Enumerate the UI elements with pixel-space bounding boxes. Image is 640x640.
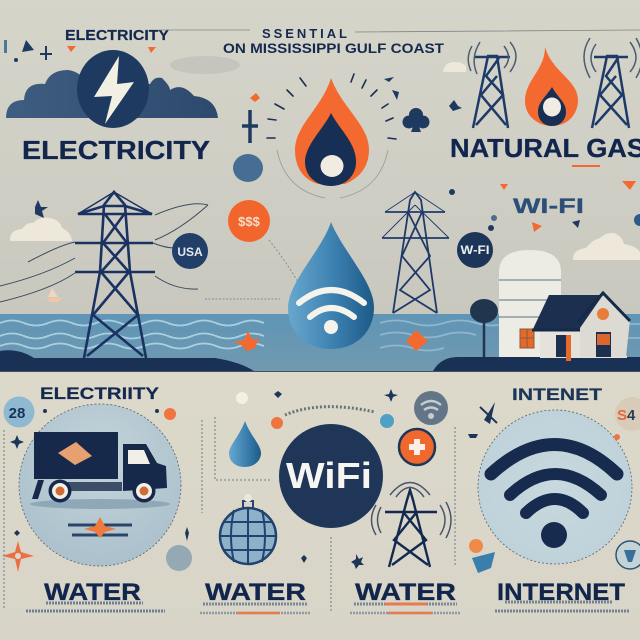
icon: teal badge partial right xyxy=(616,541,640,569)
icon: water drop with wifi xyxy=(288,222,374,349)
heading: electricity: ELECTRICITY xyxy=(22,135,210,165)
badge: grey wifi xyxy=(414,391,448,425)
badge: s4 partial xyxy=(615,397,640,431)
icon: second transmission tower xyxy=(382,192,449,313)
panel: internet wifi circle xyxy=(478,410,632,564)
ground: left shore xyxy=(0,350,254,371)
heading: water three: WATER xyxy=(355,579,456,606)
heading: intenet: INTENET xyxy=(512,385,603,404)
badge: 28: 28 xyxy=(9,405,25,422)
badge: wi-fi: W-FI xyxy=(460,245,490,257)
icons: scattered lower glyphs xyxy=(10,389,620,571)
icon: tree xyxy=(470,299,498,357)
heading: water two: WATER xyxy=(205,579,306,606)
badge: 28 xyxy=(4,396,34,428)
icon: orange boats and diamonds xyxy=(46,288,428,351)
icon: globe xyxy=(220,494,276,564)
cloud: upper right xyxy=(573,233,640,260)
background: upper scene xyxy=(0,0,640,372)
text: water one caption xyxy=(26,603,165,611)
icon: house xyxy=(532,293,630,361)
icons: scattered small upper glyphs xyxy=(4,40,640,232)
divider strip xyxy=(0,371,640,372)
badge: usa: USA xyxy=(177,245,203,259)
background: lower panel band xyxy=(0,372,640,640)
icon: orange star at left xyxy=(2,541,34,572)
badge: wifi large: WiFi xyxy=(286,455,372,496)
chart-like lines: power cables xyxy=(0,204,298,302)
badge: usa xyxy=(172,233,208,269)
heading: wi-fi: WI-FI xyxy=(513,195,584,218)
text: water two caption xyxy=(200,604,310,613)
ground: right shore xyxy=(433,357,640,371)
cloud: upper left xyxy=(10,218,72,241)
smudge: grey text shadow under title xyxy=(170,56,240,74)
text: small arc of glyphs by badge xyxy=(285,407,375,415)
panel: truck circle xyxy=(19,404,181,566)
panel: sea with waves xyxy=(0,314,640,371)
icon: main transmission tower xyxy=(75,192,155,358)
badge: wi-fi xyxy=(457,232,493,268)
badge: orange plus xyxy=(399,429,435,465)
text: internet caption xyxy=(495,602,630,611)
icon: water tank silo xyxy=(499,250,561,357)
panel: central gas flame with rays xyxy=(267,74,396,198)
cloud: tower-side small xyxy=(443,62,466,72)
panel: natural gas towers and flame xyxy=(468,38,640,128)
heading: lower electricity: ELECTRIITY xyxy=(40,384,160,403)
title: essential heading: SSENTIAL xyxy=(262,26,347,41)
text: water three caption xyxy=(350,604,460,613)
badge: s4 partial: S4 xyxy=(617,407,636,424)
title: location line: ON MISSISSIPPI GULF COAST xyxy=(223,41,445,56)
heading: internet: INTERNET xyxy=(497,579,625,606)
icon: small water drop xyxy=(229,421,261,467)
badge: dollars: $$$ xyxy=(238,214,261,229)
heading: natural gas: NATURAL GAS xyxy=(450,133,640,163)
badge: dollars xyxy=(228,200,270,242)
icon: small orange motif xyxy=(68,517,132,538)
panel: electricity cloud and bolt icon xyxy=(6,50,218,128)
icon: radio tower xyxy=(372,482,451,567)
icon: delivery truck xyxy=(32,432,167,502)
title: small electricity label: ELECTRICITY xyxy=(65,28,169,44)
heading: water one: WATER xyxy=(44,579,141,606)
icon: orange and blue badge xyxy=(469,539,495,573)
guide lines: dotted verticals in lower panel xyxy=(4,417,455,613)
badge: wifi large xyxy=(279,424,383,528)
